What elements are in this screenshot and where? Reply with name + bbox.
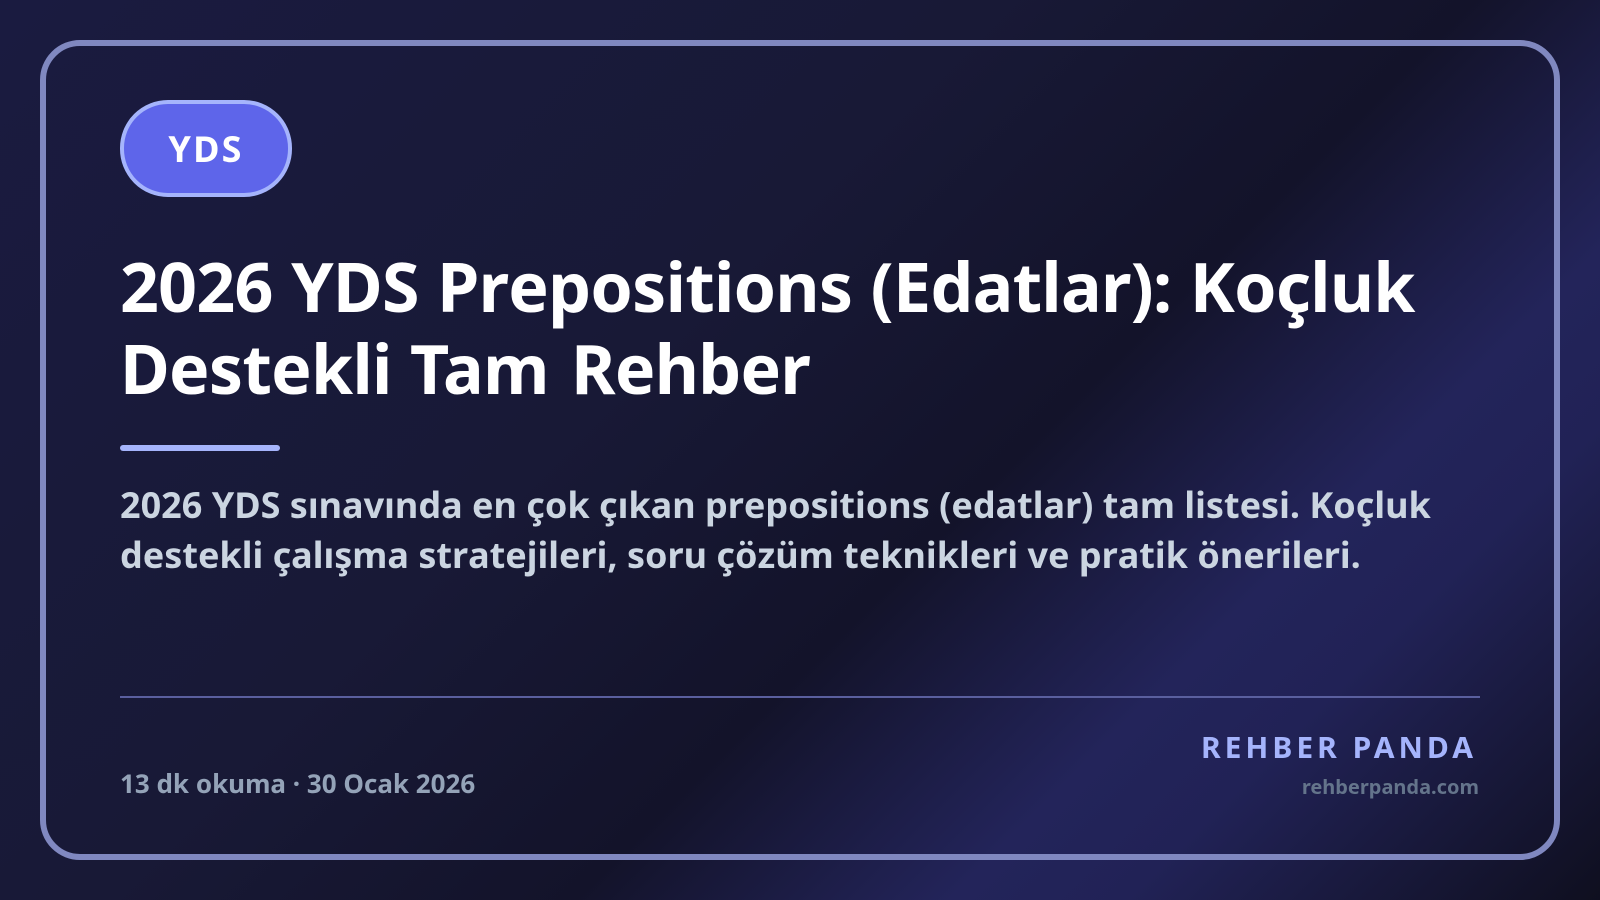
website url: rehberpanda.com: [1302, 773, 1479, 800]
badge: YDS: YDS: [168, 124, 244, 173]
badge: YDS: [120, 100, 292, 197]
reading time and date: 13 dk okuma · 30 Ocak 2026: [120, 765, 475, 801]
brand name: REHBER PANDA: [1201, 726, 1477, 767]
title: 2026 YDS Prepositions (Edatlar): Koçluk: [120, 239, 1415, 332]
accent rule: [120, 445, 280, 451]
title: Destekli Tam Rehber: [120, 321, 810, 414]
description: 2026 YDS sınavında en çok çıkan prepositions (edatlar) tam listesi. Koçluk: [120, 480, 1431, 529]
footer divider: [120, 696, 1480, 698]
description: [120, 480, 1431, 579]
title: [120, 239, 1416, 414]
description: destekli çalışma stratejileri, soru çözüm teknikleri ve pratik önerileri.: [120, 530, 1361, 579]
